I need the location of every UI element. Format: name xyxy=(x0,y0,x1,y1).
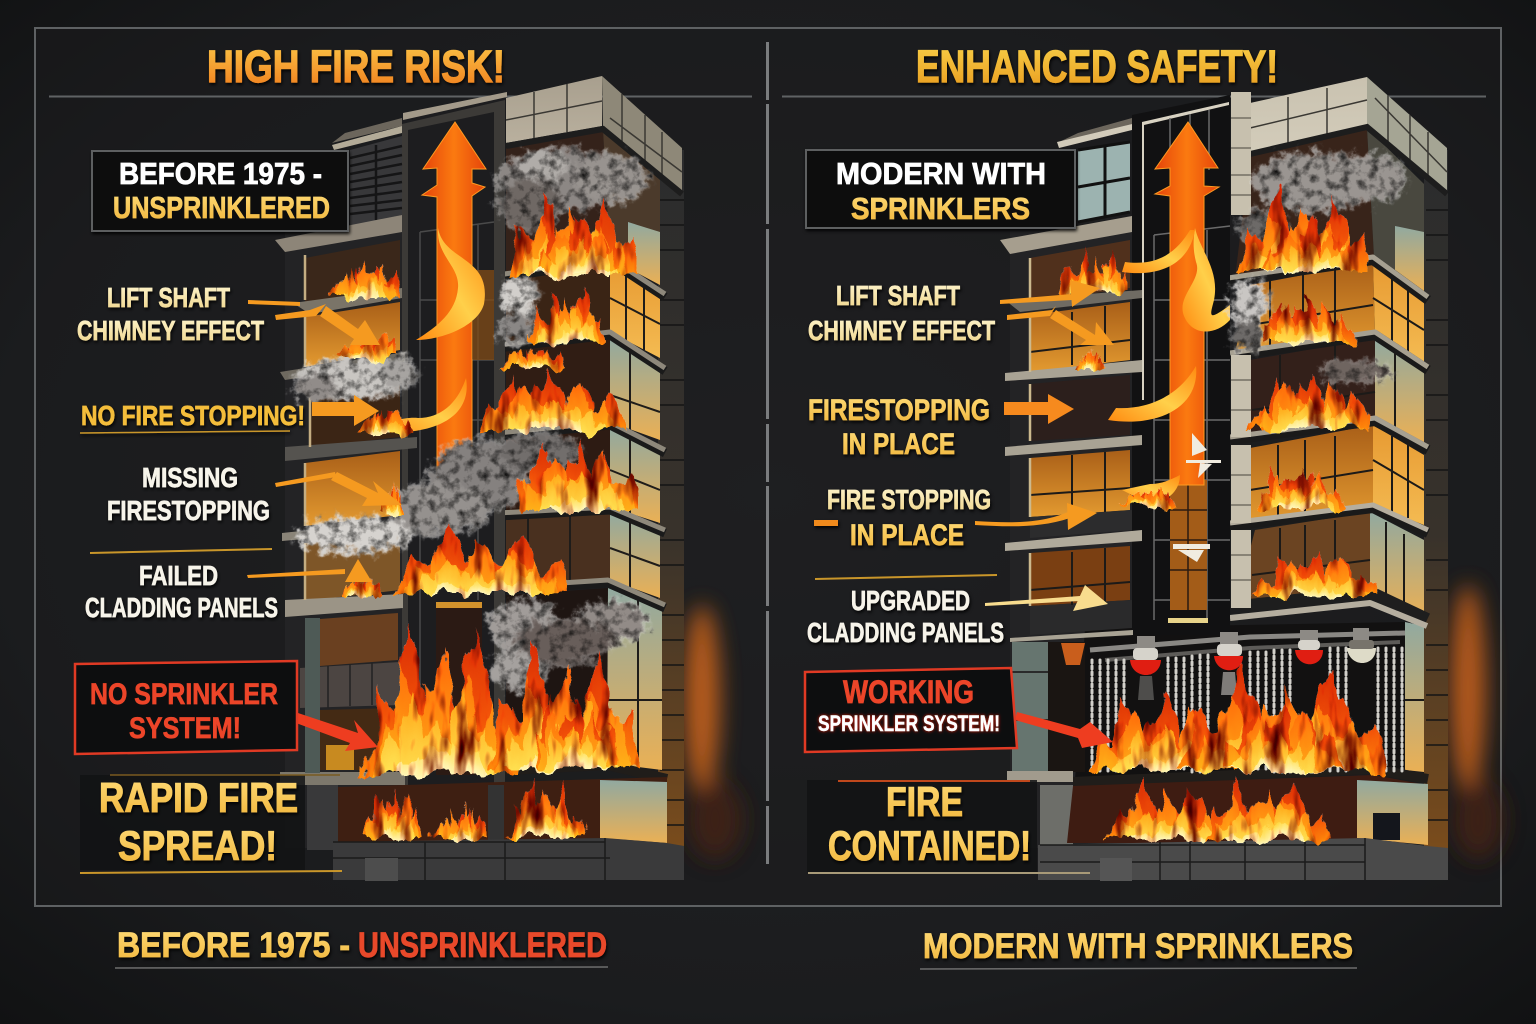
label: lift shaft chimney effect xyxy=(77,282,264,346)
base storey xyxy=(1040,785,1073,845)
lift shaft arrow xyxy=(1108,122,1230,504)
smoke xyxy=(1230,152,1406,383)
label: upgraded cladding panels xyxy=(807,585,1004,648)
arrow: chimney effect xyxy=(1007,306,1114,345)
title left: HIGH FIRE RISK! xyxy=(207,41,505,92)
parapet xyxy=(506,76,602,143)
status box: modern with sprinklers: SPRINKLERS xyxy=(851,191,1030,226)
label: fire stopping in place xyxy=(814,484,991,552)
sprinkler heads xyxy=(1130,628,1376,700)
callout: no sprinkler system: NO SPRINKLER xyxy=(90,678,278,711)
building: unsprinklered tower xyxy=(275,76,684,881)
arrow: no sprinkler xyxy=(296,713,378,751)
center dashed divider xyxy=(766,42,769,866)
label: missing firestopping: MISSING xyxy=(142,462,238,493)
side wall xyxy=(658,150,684,850)
bottom caption left: BEFORE 1975 - xyxy=(117,926,350,965)
lift shaft arrow xyxy=(376,122,486,490)
slabs right tower xyxy=(1073,257,1428,782)
status box: modern with sprinklers xyxy=(806,150,1075,228)
arrow: working sprinkler xyxy=(1015,712,1113,748)
callout: working sprinkler system: WORKING xyxy=(843,674,974,710)
bottom caption left xyxy=(115,926,608,968)
sprinkler pipe xyxy=(1090,633,1405,660)
verdict: fire contained: FIRE xyxy=(886,778,963,825)
parapet xyxy=(1250,77,1367,152)
verdict: rapid fire spread: SPREAD! xyxy=(118,822,277,869)
label: upgraded cladding panels: UPGRADED xyxy=(851,585,970,616)
arrow: firestopping in place xyxy=(1004,394,1074,424)
label: firestopping in place xyxy=(808,394,990,461)
status box: before 1975: BEFORE 1975 - xyxy=(119,156,322,191)
status box: modern with sprinklers: MODERN WITH xyxy=(836,156,1046,191)
background fire glow xyxy=(1450,585,1504,860)
callout: working sprinkler system: SPRINKLER SYSTEM! xyxy=(818,711,1000,736)
building: sprinklered tower xyxy=(1000,77,1448,881)
label: failed cladding panels xyxy=(85,560,278,623)
smoke xyxy=(292,148,650,690)
heading rule lines xyxy=(49,96,1486,98)
labels left xyxy=(75,151,348,873)
label: lift shaft chimney effect: LIFT SHAFT xyxy=(836,280,960,311)
verdict: rapid fire spread xyxy=(80,774,342,873)
callout: no sprinkler system: SYSTEM! xyxy=(129,712,241,745)
callout: working sprinkler system xyxy=(805,668,1017,752)
label: fire stopping in place: FIRE STOPPING xyxy=(827,484,991,515)
label: firestopping in place: FIRESTOPPING xyxy=(808,394,990,427)
label: no fire stopping: NO FIRE STOPPING! xyxy=(81,400,305,431)
panel: modern with sprinklers xyxy=(975,77,1504,881)
left wing xyxy=(275,118,417,785)
titles xyxy=(207,41,1278,92)
label: failed cladding panels: CLADDING PANELS xyxy=(85,592,278,623)
bottom caption left: UNSPRINKLERED xyxy=(358,926,607,965)
flames xyxy=(1063,188,1388,840)
arrow: missing firestopping xyxy=(275,472,402,506)
callout: no sprinkler system xyxy=(75,661,297,754)
separator line xyxy=(815,575,997,579)
label: failed cladding panels: FAILED xyxy=(139,560,218,591)
arrow: lift shaft top xyxy=(1000,280,1100,307)
arrow: fire stopping in place xyxy=(975,503,1097,530)
label: missing firestopping: FIRESTOPPING xyxy=(107,495,270,526)
arrow: upgraded cladding xyxy=(985,585,1108,611)
verdict: fire contained: CONTAINED! xyxy=(828,822,1031,869)
panel: before 1975 unsprinklered xyxy=(247,76,743,881)
side wall xyxy=(1424,150,1448,850)
label: lift shaft chimney effect: LIFT SHAFT xyxy=(107,282,230,313)
right tower floors xyxy=(506,130,662,770)
label: firestopping in place: IN PLACE xyxy=(842,428,955,461)
beige column xyxy=(1231,92,1251,215)
shaft white marks xyxy=(1168,433,1221,623)
left wing wall xyxy=(285,228,405,848)
verdict: rapid fire spread: RAPID FIRE xyxy=(99,774,298,821)
bottom caption right: MODERN WITH SPRINKLERS xyxy=(923,927,1353,966)
label: upgraded cladding panels: CLADDING PANELS xyxy=(807,617,1004,648)
labels right xyxy=(805,150,1090,873)
label: missing firestopping xyxy=(107,462,270,526)
status box: before 1975: UNSPRINKLERED xyxy=(113,190,330,225)
left wing xyxy=(1000,118,1142,782)
slabs right tower xyxy=(407,258,667,779)
flames xyxy=(330,192,642,840)
base storey xyxy=(338,777,667,843)
flame swirls in shaft xyxy=(1183,228,1230,332)
label: fire stopping in place: IN PLACE xyxy=(850,519,964,552)
verdict: fire contained xyxy=(807,778,1090,873)
arrow: no fire stopping xyxy=(312,395,379,426)
label: lift shaft chimney effect xyxy=(808,280,995,346)
arrow: failed cladding xyxy=(247,559,372,582)
central shaft xyxy=(402,95,505,850)
label: lift shaft chimney effect: CHIMNEY EFFECT xyxy=(808,315,995,346)
flame swirls in shaft xyxy=(416,228,485,340)
arrow: lift shaft xyxy=(248,300,380,345)
callout arrows xyxy=(975,280,1114,748)
title right: ENHANCED SAFETY! xyxy=(916,41,1278,92)
status box: before 1975 xyxy=(92,151,348,231)
background fire glow xyxy=(684,605,743,860)
separator line xyxy=(90,549,272,553)
water spray xyxy=(1092,648,1402,772)
left wing wall xyxy=(1010,228,1135,848)
central shaft xyxy=(1132,95,1230,635)
label: lift shaft chimney effect: CHIMNEY EFFECT xyxy=(77,315,264,346)
right tower floors xyxy=(1075,128,1424,780)
callout arrows xyxy=(247,300,402,751)
